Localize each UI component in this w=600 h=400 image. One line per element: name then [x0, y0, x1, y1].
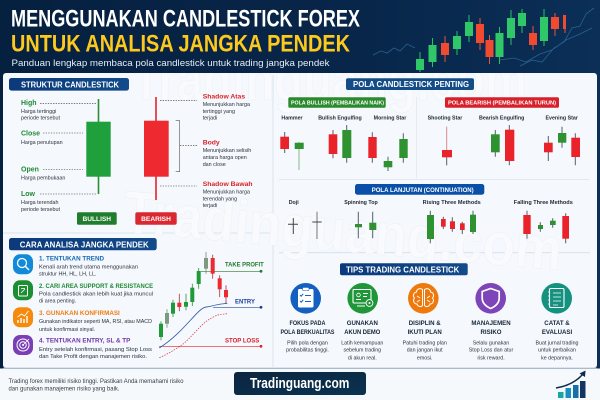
pattern: spinning top: [344, 200, 378, 238]
tip 1: probabilitas tinggi.: [286, 348, 329, 354]
callouts: bullish parts: Harga terendah: [21, 200, 58, 206]
heading: tips trading: TIPS TRADING CANDLESTICK: [346, 266, 460, 275]
tip 4: RISIKO: [480, 329, 502, 336]
label: bearish: BEARISH: [141, 216, 171, 223]
tip 4: MANAJEMEN: [471, 320, 511, 327]
pattern: bullish engulfing: [318, 116, 362, 163]
callouts: bullish parts: Harga pembukaan: [21, 176, 65, 182]
heading: tips trading: [340, 263, 468, 275]
tip 5: CATAT &: [544, 320, 570, 327]
callouts: bullish parts: Harga tertinggi: [21, 109, 56, 115]
header candlestick chart: [373, 8, 594, 72]
tip 5: [536, 283, 579, 361]
step 1: [13, 254, 138, 277]
step 3: Gunakan indikator seperti MA, RSI, atau MACD: [39, 319, 152, 325]
footer disclaimer: [8, 379, 184, 392]
pattern: evening star: Evening Star: [546, 116, 578, 122]
pattern: shooting star: Shooting Star: [428, 116, 462, 122]
tip 2: sebelum trading: [343, 348, 381, 354]
footer disclaimer: Trading forex memiliki risiko tinggi. Pastikan Anda memahami risiko: [8, 379, 184, 385]
callouts: bearish parts: terjadi: [203, 203, 217, 209]
pattern: bullish engulfing: Bullish Engulfing: [318, 116, 362, 122]
pattern: doji: Doji: [289, 200, 299, 206]
label: pola bearish: POLA BEARISH (PEMBALIKAN TURUN): [448, 101, 556, 107]
icon: magnifier: [13, 254, 33, 274]
icon: shield: [475, 283, 506, 314]
panel: struktur candlestick: [9, 78, 253, 225]
bearish candle: [144, 97, 169, 200]
tip 4: Stop Loss dan atur: [469, 348, 513, 354]
tip 2: Latih kemampuan: [341, 340, 383, 346]
callouts: bearish parts: Menunjukkan harga: [203, 102, 250, 108]
step 4: Entry setelah konfirmasi, pasang Stop Loss: [39, 347, 152, 353]
tip 2: AKUN DEMO: [344, 329, 381, 336]
pattern: bearish engulfing: [479, 116, 524, 165]
heading: cara analisa: CARA ANALISA JANGKA PENDEK: [20, 239, 149, 249]
tip 5: Buat jurnal trading: [536, 340, 579, 346]
footer brand button: [234, 372, 366, 395]
icon: growth bars and arrow: [556, 370, 586, 398]
step 2: [13, 280, 153, 304]
tip 4: risk reward.: [477, 355, 505, 361]
pattern: rising three methods: [423, 200, 481, 243]
pattern: rising three methods: Rising Three Methods: [423, 200, 481, 206]
panel: pola candlestick penting: [279, 78, 589, 243]
step 3: [13, 307, 152, 333]
pattern: spinning top: Spinning Top: [344, 200, 378, 206]
bullish candle: [86, 99, 111, 194]
callouts: bearish parts: Menunjukkan selisih: [203, 148, 251, 154]
heading: pola candlestick penting: POLA CANDLESTICK PENTING: [353, 80, 469, 89]
footer disclaimer: dan gunakan manajemen risiko yang baik.: [8, 386, 120, 392]
callouts: bearish parts: Body: [203, 140, 220, 146]
label: pola bullish: POLA BULLISH (PEMBALIKAN NAIK): [291, 101, 384, 107]
callouts: bearish parts: tertinggi yang: [203, 109, 235, 115]
step 1: 1. TENTUKAN TREND: [39, 256, 105, 262]
callouts: bullish parts: Harga penutupan: [21, 140, 63, 146]
heading: pola lanjutan: POLA LANJUTAN (CONTINUATION): [372, 187, 474, 194]
tip 3: Patuhi trading plan: [403, 340, 447, 346]
step 2: di area penting.: [39, 298, 76, 304]
pattern: falling three methods: Falling Three Methods: [514, 200, 573, 206]
tip 2: GUNAKAN: [347, 320, 378, 327]
callouts: bearish parts: antara harga open: [203, 155, 247, 161]
pattern: doji: [288, 200, 322, 239]
step 3: 3. GUNAKAN KONFIRMASI: [39, 310, 120, 317]
tip 5: untuk perbaikan: [538, 348, 576, 354]
tip 4: Selalu gunakan: [473, 340, 509, 346]
tip 1: FOKUS PADA: [290, 320, 326, 327]
tip 1: POLA BERKUALITAS: [280, 329, 334, 336]
chart: entry, take profit, stop loss: STOP LOSS: [225, 338, 260, 345]
tip 3: IKUTI PLAN: [408, 329, 442, 336]
pattern: bearish engulfing: Bearish Engulfing: [479, 116, 524, 122]
callouts: bearish parts: dan close: [203, 162, 226, 168]
chart: entry, take profit, stop loss: ENTRY: [235, 298, 256, 305]
callouts: bearish parts: Shadow Atas: [203, 94, 245, 100]
footer background: [0, 368, 600, 400]
subtitle: Panduan lengkap membaca pola candlestick untuk trading jangka pendek: [12, 58, 330, 69]
label: pola bullish: [288, 97, 386, 108]
step 2: 2. CARI AREA SUPPORT & RESISTANCE: [39, 283, 153, 290]
callouts: bullish parts: High: [21, 100, 37, 107]
tip 2: [341, 283, 383, 361]
heading: struktur candlestick: [9, 78, 129, 91]
tip 3: DISIPLIN &: [409, 320, 441, 327]
icon: clipboard: [13, 280, 33, 300]
title: MENGGUNAKAN CANDLESTICK FOREX: [11, 6, 360, 33]
callouts: bearish parts: Menunjukkan harga: [203, 190, 250, 196]
pattern: morning star: Morning Star: [374, 116, 406, 122]
title: UNTUK ANALISA JANGKA PENDEK: [11, 31, 351, 58]
icon: brain: [408, 283, 439, 314]
step 4: [13, 335, 152, 360]
pattern: evening star: [544, 116, 580, 165]
pattern: hammer: [280, 116, 304, 170]
callouts: bullish parts: Close: [21, 130, 40, 138]
step 4: dan Take Profit dengan manajemen risiko.: [39, 354, 147, 360]
tip 5: EVALUASI: [542, 329, 572, 336]
label: pola bearish: [445, 97, 559, 108]
chart: entry, take profit, stop loss: TAKE PROFIT: [225, 262, 264, 269]
footer brand button: Tradinguang.com: [250, 376, 349, 392]
title: [11, 6, 360, 58]
tip 4: [469, 283, 513, 361]
step 4: 4. TENTUKAN ENTRY, SL & TP: [39, 338, 130, 345]
label: bullish: BULLISH: [83, 216, 111, 223]
pattern: shooting star: [428, 116, 462, 165]
watermark: [134, 212, 559, 254]
callouts: bullish parts: Open: [21, 166, 39, 174]
pattern: falling three methods: [514, 200, 573, 243]
icon: checklist: [290, 283, 321, 314]
label: bearish: [135, 212, 177, 225]
pattern: hammer: Hammer: [281, 116, 303, 122]
callouts: bearish parts: [160, 94, 253, 209]
icon: demo screen: [347, 283, 378, 314]
main content panel: [3, 73, 597, 368]
tip 1: [280, 283, 334, 354]
label: bullish: [77, 212, 117, 225]
step 1: Kenali arah trend utama menggunakan: [39, 264, 138, 270]
chart: entry, take profit, stop loss: [159, 252, 264, 358]
heading: pola lanjutan: [355, 184, 484, 195]
panel: tips trading candlestick: [280, 263, 579, 361]
callouts: bullish parts: Low: [21, 191, 36, 198]
tip 3: dan jangan ikut: [407, 348, 443, 354]
icon: rising chart: [13, 307, 33, 327]
icon: target: [13, 335, 33, 355]
pattern: morning star: [368, 116, 408, 171]
tip 3: [403, 283, 447, 361]
step 1: struktur HH, HL, LH, LL.: [39, 271, 97, 277]
callouts: bearish parts: Shadow Bawah: [203, 181, 253, 188]
step 2: Pola candlestick akan lebih kuat jika muncul: [39, 292, 153, 298]
callouts: bearish parts: terjadi: [203, 116, 217, 122]
callouts: bullish parts: [21, 100, 96, 213]
tip 2: di akun real.: [348, 355, 377, 361]
step 3: untuk konfirmasi sinyal.: [39, 327, 95, 333]
tip 3: emosi.: [417, 355, 433, 361]
tip 1: Pilih pola dengan: [287, 340, 328, 346]
callouts: bearish parts: terendah yang: [203, 196, 237, 202]
callouts: bullish parts: periode tersebut: [21, 116, 60, 122]
callouts: bullish parts: periode tersebut: [21, 207, 60, 213]
heading: struktur candlestick: STRUKTUR CANDLESTICK: [21, 80, 119, 89]
heading: pola candlestick penting: [346, 78, 474, 90]
tip 5: ke depannya.: [541, 355, 573, 361]
icon: journal: [541, 283, 572, 314]
panel: cara analisa jangka pendek: [9, 238, 264, 360]
